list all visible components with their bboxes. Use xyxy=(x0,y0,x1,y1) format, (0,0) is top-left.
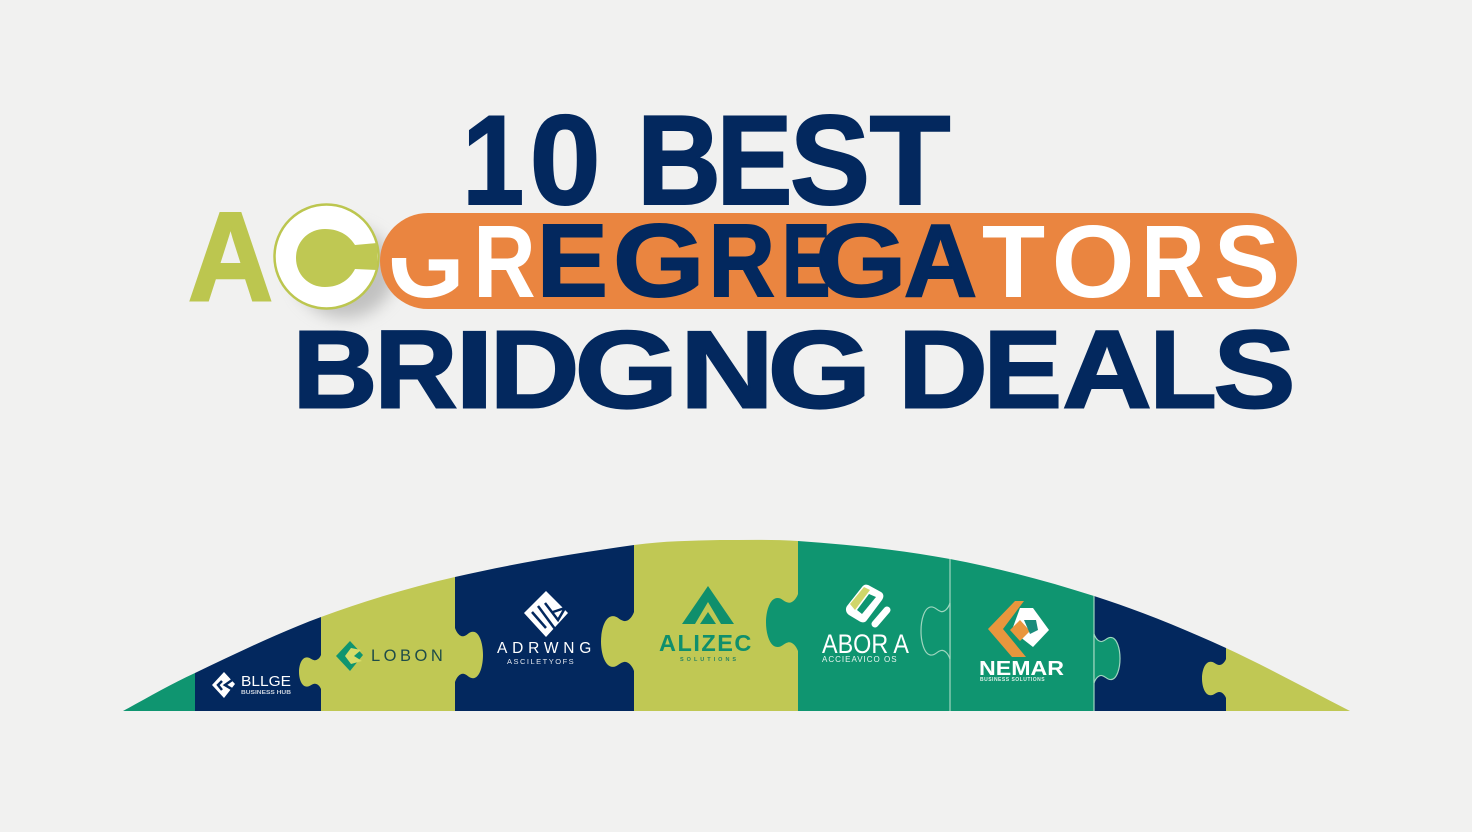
title: bridging deals: L xyxy=(1150,308,1217,432)
logo: BLLGE: BLLGE xyxy=(241,673,291,690)
logo: LOBON: LOBON xyxy=(371,647,446,665)
puzzle tab green into navy xyxy=(1094,634,1120,683)
orange pill xyxy=(380,213,1297,309)
puzzle tab green outlined xyxy=(921,603,950,659)
title: bridging deals: G xyxy=(768,308,872,432)
infographic canvas xyxy=(123,114,1350,711)
logo: ADRWNG: ASCILETYOFS xyxy=(507,657,575,666)
title: 10 best: 1 xyxy=(462,89,524,231)
puzzle tab lime right xyxy=(455,628,483,682)
logo: ADRWNG: ADRWNG xyxy=(497,640,596,657)
puzzle tab lime into navy xyxy=(299,655,321,689)
logo: ABORA: ABOR A xyxy=(822,629,909,659)
white letters: O xyxy=(1052,204,1135,319)
title: 10 best: T xyxy=(870,89,950,231)
logo: ALIZEC xyxy=(659,586,753,663)
title: bridging deals xyxy=(292,308,1296,432)
navy letters xyxy=(537,203,977,318)
title: bridging deals: G xyxy=(574,308,678,432)
navy letters: G xyxy=(613,203,704,318)
puzzle arch xyxy=(120,530,1356,711)
logo: BLLGE: BUSINESS HUB xyxy=(241,690,291,696)
title: bridging deals: I xyxy=(455,308,494,432)
puzzle tab lime into navy right xyxy=(1202,659,1226,698)
navy letters: E xyxy=(537,203,608,318)
navy letters: E xyxy=(782,203,830,318)
clipped white G: G xyxy=(388,204,464,320)
title: 10 best: E xyxy=(716,89,792,231)
title: bridging deals: B xyxy=(292,308,378,432)
logo: ABORA: ACCIEAVICO OS xyxy=(822,655,898,664)
logo: NEMAR xyxy=(979,601,1065,683)
white letters: S xyxy=(1214,204,1280,319)
logo: NEMAR: NEMAR xyxy=(979,658,1065,680)
navy letters: A xyxy=(904,203,977,318)
logo: NEMAR: BUSINESS SOLUTIONS xyxy=(980,677,1045,683)
title: bridging deals: D xyxy=(490,308,580,432)
logo: ADRWNG xyxy=(497,591,596,666)
puzzle tab lime left xyxy=(601,612,634,671)
logo: BLLGE xyxy=(212,672,291,698)
title: bridging deals: R xyxy=(374,308,458,432)
logo: ALIZEC: SOLUTIONS xyxy=(680,657,739,663)
logo: ALIZEC: ALIZEC xyxy=(659,630,753,656)
title: bridging deals: N xyxy=(680,308,774,432)
logo: LOBON xyxy=(336,641,446,671)
navy letters: G xyxy=(815,203,906,318)
title: 10 best: B xyxy=(637,89,721,231)
white letters: R xyxy=(1141,204,1205,319)
puzzle tab green into lime xyxy=(766,594,798,651)
navy letters: R xyxy=(709,203,775,318)
white letters: T xyxy=(982,204,1045,319)
logo: ABORA xyxy=(822,585,909,664)
title: aggregators pill xyxy=(189,203,1297,325)
letter A: A xyxy=(188,185,273,327)
letter C in circle: C xyxy=(280,185,376,328)
white letters xyxy=(982,204,1280,319)
title: 10 best: S xyxy=(790,89,870,231)
title: 10 best xyxy=(462,89,950,231)
title: bridging deals: D xyxy=(898,308,988,432)
white R: R xyxy=(473,204,536,319)
title: bridging deals: E xyxy=(983,308,1062,432)
title: bridging deals: S xyxy=(1213,308,1296,432)
title: bridging deals: A xyxy=(1062,308,1152,432)
title: 10 best: 0 xyxy=(530,89,601,231)
